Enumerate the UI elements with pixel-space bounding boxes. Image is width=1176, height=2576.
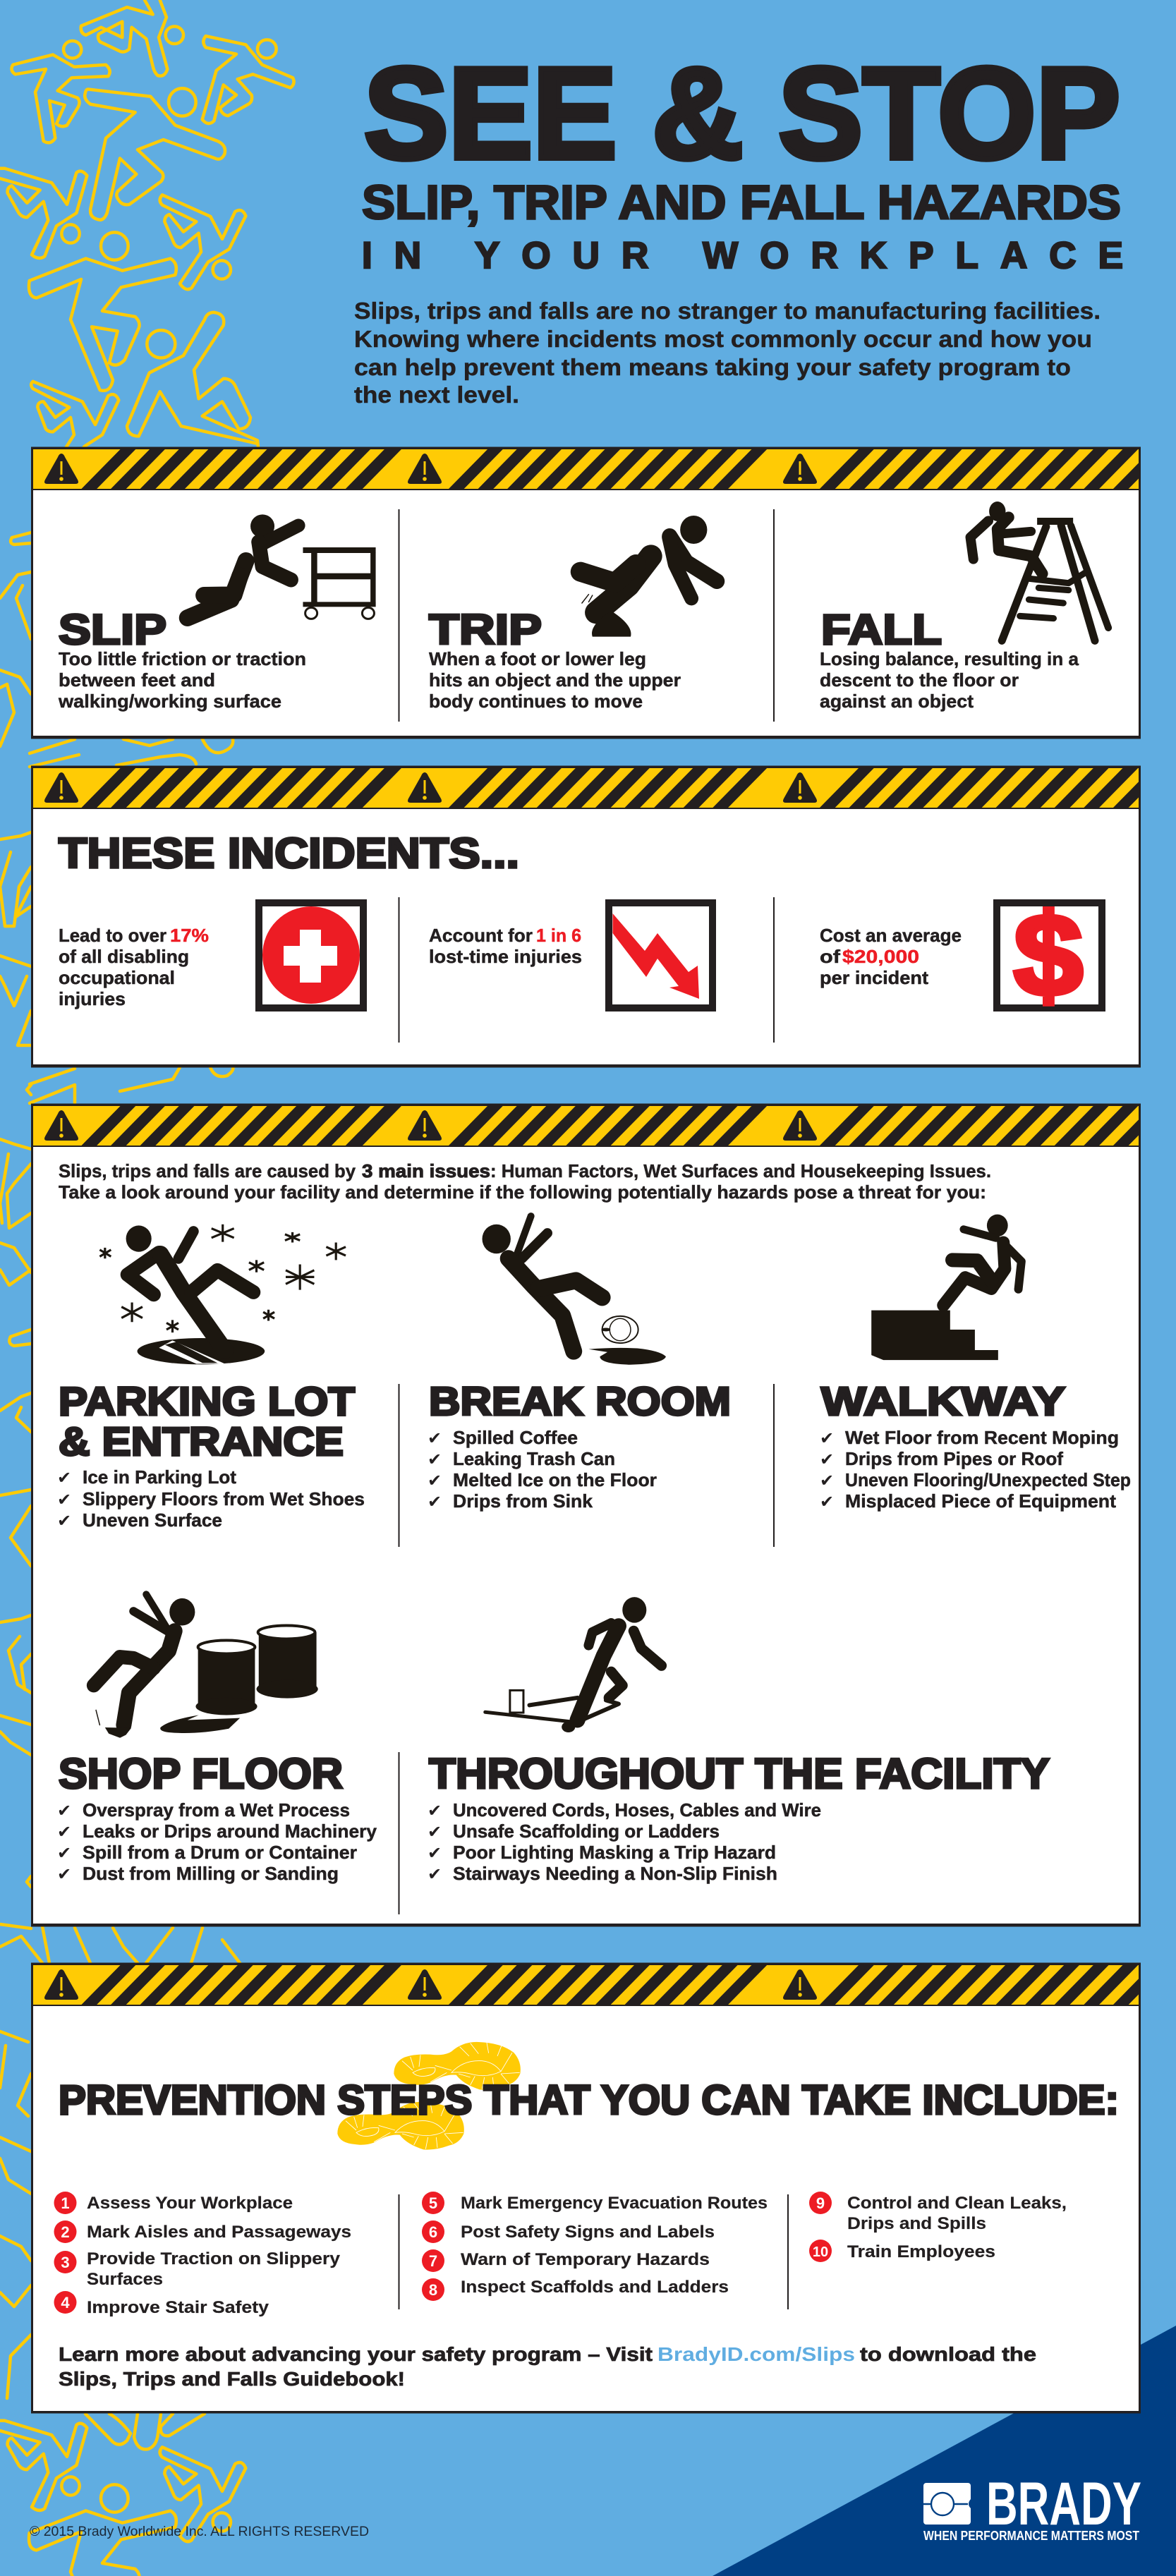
intro paragraph: Slips, trips and falls are no stranger to manufacturing facilities. <box>354 298 1101 324</box>
card: throughout the facility: ✔ <box>428 1843 442 1863</box>
card: throughout the facility: Uncovered Cords, Hoses, Cables and Wire <box>453 1799 821 1821</box>
card: shop floor: Overspray from a Wet Process <box>83 1799 350 1821</box>
card: break room <box>428 1379 731 1512</box>
list column: steps 1 to 4: Improve Stair Safety <box>87 2298 269 2317</box>
intro paragraph: the next level. <box>354 382 519 408</box>
list column: steps 9 and 10 <box>809 2192 1067 2262</box>
text: fall: Losing balance, resulting in a <box>820 648 1079 669</box>
intro text: three main issues: Slips, trips and falls are caused by <box>59 1160 356 1181</box>
list column: steps 9 and 10: Train Employees <box>847 2242 995 2261</box>
decorative yellow figures: bottom cluster <box>0 2414 245 2576</box>
list column: steps 9 and 10: Control and Clean Leaks, <box>847 2194 1067 2213</box>
card: throughout the facility: ✔ <box>428 1864 442 1884</box>
card: throughout the facility: ✔ <box>428 1822 442 1842</box>
icon: tripping over cord at outlet <box>485 1597 662 1732</box>
stat: 17 percent <box>59 925 209 1009</box>
icon: break room slip with coffee cup <box>483 1216 666 1365</box>
stat: 17 percent: injuries <box>59 988 126 1009</box>
card: throughout the facility: Poor Lighting Masking a Trip Hazard <box>453 1842 776 1863</box>
card: shop floor: ✔ <box>57 1864 71 1884</box>
text: fall: FALL <box>821 606 942 653</box>
card: walkway: Wet Floor from Recent Moping <box>845 1427 1119 1448</box>
text: trip: hits an object and the upper <box>429 669 681 691</box>
card: break room: ✔ <box>428 1471 442 1490</box>
navy corner triangle <box>713 2326 1176 2576</box>
icon: dollar box <box>997 890 1102 1020</box>
list column: steps 1 to 4 <box>54 2192 351 2317</box>
card: parking lot and entrance: Slippery Floors from Wet Shoes <box>83 1488 365 1509</box>
text: slip: walking/working surface <box>58 691 281 712</box>
list column: steps 1 to 4: 2 <box>61 2223 70 2241</box>
subtitle: SLIP, TRIP AND FALL HAZARDS <box>362 176 1121 229</box>
list column: steps 5 to 8: Post Safety Signs and Labels <box>461 2223 715 2242</box>
card: throughout the facility: ✔ <box>428 1801 442 1821</box>
logo tagline: WHEN PERFORMANCE MATTERS MOST <box>923 2529 1139 2543</box>
card: break room: Spilled Coffee <box>453 1427 578 1448</box>
card: break room: Leaking Trash Can <box>453 1448 615 1469</box>
decorative yellow figures: gaps between panels <box>30 739 233 1103</box>
title block <box>362 40 1123 277</box>
card: parking lot and entrance: ✔ <box>57 1490 71 1509</box>
list column: steps 5 to 8: 8 <box>429 2281 437 2299</box>
card: shop floor: Leaks or Drips around Machinery <box>83 1821 377 1842</box>
card: break room: ✔ <box>428 1428 442 1448</box>
card: walkway: ✔ <box>820 1428 834 1448</box>
card: walkway: ✔ <box>820 1450 834 1469</box>
list column: steps 9 and 10: 9 <box>816 2194 825 2212</box>
list column: steps 5 to 8: Mark Emergency Evacuation Routes <box>461 2194 768 2213</box>
card: parking lot and entrance <box>57 1379 365 1531</box>
brady logo <box>923 2470 1141 2543</box>
panel: slip trip fall definitions <box>31 447 1168 739</box>
text: slip <box>58 606 306 712</box>
card: shop floor: ✔ <box>57 1843 71 1863</box>
text: trip: body continues to move <box>429 691 643 712</box>
card: shop floor <box>57 1750 377 1884</box>
intro paragraph: Knowing where incidents most commonly occur and how you <box>354 326 1092 352</box>
stat: 20,000 dollars <box>820 925 962 988</box>
card: parking lot and entrance: & ENTRANCE <box>59 1419 344 1464</box>
icon: slip figure and cart <box>188 514 376 619</box>
text: fall <box>820 606 1079 712</box>
list column: steps 1 to 4: Assess Your Workplace <box>87 2194 293 2213</box>
list column: steps 5 to 8: 6 <box>429 2223 437 2241</box>
call to action text: Slips, Trips and Falls Guidebook! <box>59 2368 405 2390</box>
card: shop floor: ✔ <box>57 1801 71 1821</box>
intro text: three main issues <box>59 1160 991 1203</box>
intro text: three main issues: 3 main issues <box>362 1160 490 1181</box>
list column: steps 5 to 8: Warn of Temporary Hazards <box>461 2250 710 2269</box>
call to action text <box>59 2343 1036 2390</box>
icon: trip figure and rock <box>581 516 717 637</box>
text: trip <box>429 606 681 712</box>
card: break room: ✔ <box>428 1450 442 1469</box>
card: parking lot and entrance: ✔ <box>57 1468 71 1488</box>
card: throughout the facility: Stairways Needing a Non-Slip Finish <box>453 1863 777 1884</box>
stat: 1 in 6 <box>429 925 582 967</box>
card: shop floor: ✔ <box>57 1822 71 1842</box>
list column: steps 1 to 4: 1 <box>61 2194 70 2212</box>
stat: 20,000 dollars: Cost an average <box>820 925 962 946</box>
icon: dollar box: $ <box>1014 890 1083 1020</box>
stat: 17 percent: 17% <box>170 925 209 946</box>
icon: shop floor slip with drums <box>94 1594 318 1738</box>
list column: steps 5 to 8: 7 <box>429 2252 437 2270</box>
card: walkway <box>820 1379 1131 1512</box>
stat: 17 percent: Lead to over <box>59 925 166 946</box>
intro text: three main issues: : Human Factors, Wet Surfaces and Housekeeping Issues. <box>490 1160 991 1181</box>
stat: 20,000 dollars: $20,000 <box>842 946 919 967</box>
list column: steps 5 to 8 <box>422 2192 768 2301</box>
stat: 17 percent: occupational <box>59 967 175 988</box>
list column: steps 1 to 4: Provide Traction on Slippery <box>87 2249 341 2268</box>
list column: steps 5 to 8: 5 <box>429 2194 437 2212</box>
card: shop floor: SHOP FLOOR <box>59 1750 343 1797</box>
panel: these incidents <box>31 766 1168 1067</box>
intro paragraph: can help prevent them means taking your safety program to <box>354 354 1071 380</box>
card: break room: ✔ <box>428 1492 442 1512</box>
icon: yellow shoe prints <box>337 2042 521 2150</box>
call to action text: to download the <box>860 2343 1036 2365</box>
card: parking lot and entrance: Uneven Surface <box>83 1509 222 1531</box>
icon: fall figure on ladder <box>971 502 1108 640</box>
text: trip: TRIP <box>429 606 542 653</box>
card: break room: Drips from Sink <box>453 1490 593 1512</box>
stat: 1 in 6: Account for <box>429 925 533 946</box>
heading: prevention steps: PREVENTION STEPS THAT YOU CAN TAKE INCLUDE: <box>59 2077 1119 2123</box>
subtitle: in your workplace: IN YOUR WORKPLACE <box>362 235 1123 277</box>
stat: 17 percent: of all disabling <box>59 946 189 967</box>
card: throughout the facility: THROUGHOUT THE FACILITY <box>429 1750 1050 1797</box>
list column: steps 5 to 8: Inspect Scaffolds and Ladders <box>461 2278 729 2297</box>
card: throughout the facility <box>428 1750 1050 1884</box>
card: walkway: ✔ <box>820 1471 834 1490</box>
card: shop floor: Dust from Milling or Sanding <box>83 1863 339 1884</box>
text: fall: descent to the floor or <box>820 669 1019 691</box>
card: walkway: Drips from Pipes or Roof <box>845 1448 1063 1469</box>
call to action text: Learn more about advancing your safety program – Visit <box>59 2343 653 2365</box>
icon: parking lot slip with snowflakes <box>99 1225 346 1364</box>
copyright: © 2015 Brady Worldwide Inc. ALL RIGHTS RESERVED <box>30 2525 369 2539</box>
icon: walkway fall on stairs <box>871 1215 1022 1360</box>
list column: steps 1 to 4: Surfaces <box>87 2270 163 2289</box>
stat: 20,000 dollars: per incident <box>820 967 928 988</box>
call to action text: BradyID.com/Slips <box>657 2343 855 2365</box>
stat: 1 in 6: lost-time injuries <box>429 946 582 967</box>
panel: hazards by area <box>31 1104 1168 1926</box>
icon: medical cross box <box>259 899 363 1011</box>
intro text: three main issues: Take a look around your facility and determine if the following potentially hazards pose a threat for you: <box>59 1181 986 1203</box>
text: trip: When a foot or lower leg <box>429 648 646 669</box>
icon: logo mark <box>923 2483 971 2525</box>
title: see and stop: SEE & STOP <box>364 40 1120 186</box>
list column: steps 1 to 4: 3 <box>61 2254 70 2271</box>
list column: steps 1 to 4: 4 <box>61 2294 70 2311</box>
card: parking lot and entrance: PARKING LOT <box>59 1379 355 1424</box>
text: slip: between feet and <box>59 669 215 691</box>
card: parking lot and entrance: ✔ <box>57 1511 71 1531</box>
card: shop floor: Spill from a Drum or Container <box>83 1842 357 1863</box>
icon: falling arrow box <box>609 903 713 1008</box>
list column: steps 1 to 4: Mark Aisles and Passageways <box>87 2223 351 2242</box>
intro paragraph <box>354 298 1101 408</box>
card: throughout the facility: Unsafe Scaffolding or Ladders <box>453 1821 720 1842</box>
panel: prevention steps <box>31 1963 1168 2413</box>
card: walkway: WALKWAY <box>821 1379 1065 1424</box>
stat: 1 in 6: 1 in 6 <box>536 925 581 946</box>
card: parking lot and entrance: Ice in Parking Lot <box>83 1466 236 1488</box>
card: walkway: Uneven Flooring/Unexpected Step <box>845 1469 1131 1490</box>
card: walkway: ✔ <box>820 1492 834 1512</box>
decorative yellow figures: top cluster <box>0 0 294 451</box>
text: slip: Too little friction or traction <box>59 648 306 669</box>
text: slip: SLIP <box>59 606 166 653</box>
stat: 20,000 dollars: of <box>820 946 840 967</box>
card: break room: Melted Ice on the Floor <box>453 1469 657 1490</box>
card: walkway: Misplaced Piece of Equipment <box>845 1490 1116 1512</box>
list column: steps 9 and 10: Drips and Spills <box>847 2214 986 2233</box>
text: fall: against an object <box>820 691 974 712</box>
heading: these incidents: THESE INCIDENTS... <box>59 830 519 877</box>
card: break room: BREAK ROOM <box>429 1379 731 1424</box>
list column: steps 9 and 10: 10 <box>813 2244 828 2260</box>
decorative yellow figures: left edge strands <box>0 533 240 2398</box>
